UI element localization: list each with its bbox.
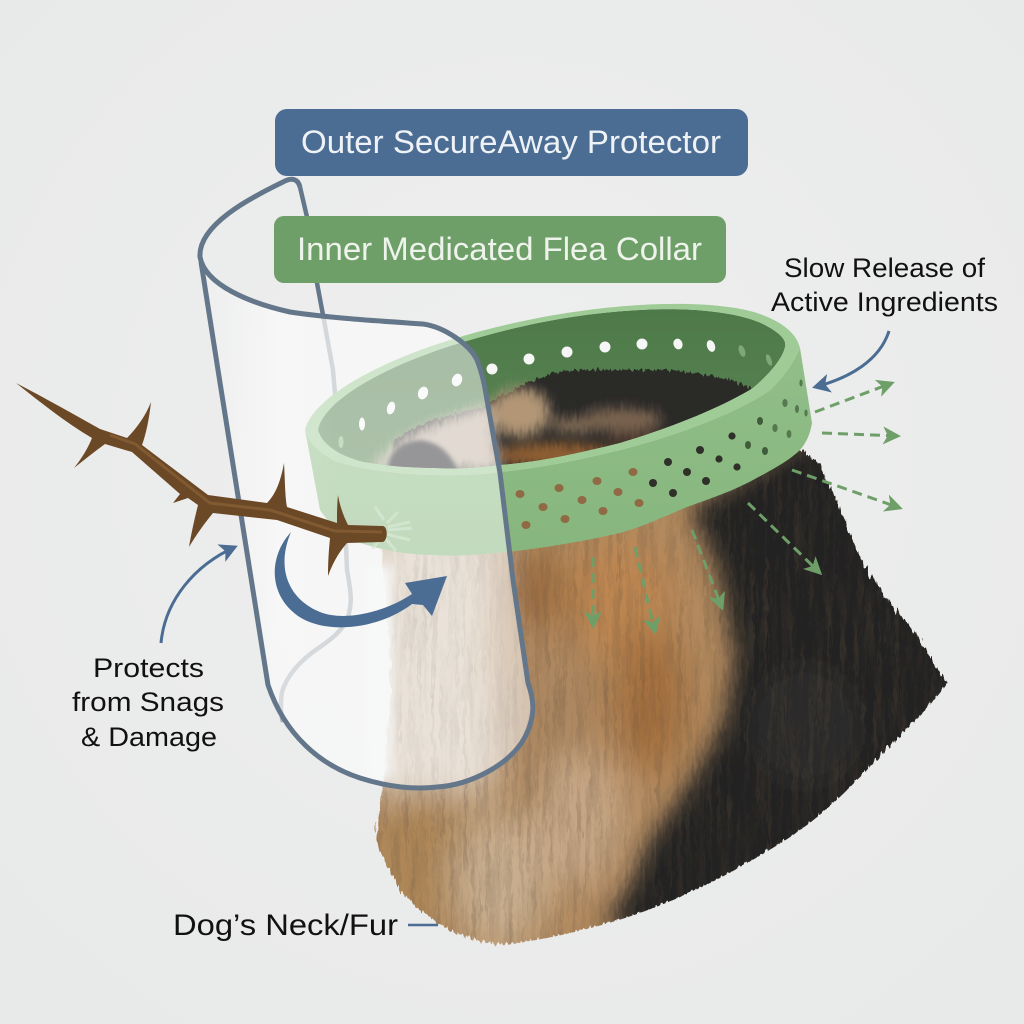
inner wall perforations	[338, 337, 773, 448]
pointer arrow: slow release	[815, 331, 889, 387]
release arrows	[593, 383, 900, 632]
pointer arrow: protects	[161, 547, 235, 643]
collar band and rim	[305, 304, 812, 556]
text: dog's neck: Dog’s Neck/Fur	[173, 909, 398, 942]
front perforations over tan fur	[516, 468, 644, 529]
outer protector shield	[200, 179, 533, 788]
thorn highlight	[110, 435, 382, 532]
dog's head inside the collar	[370, 367, 752, 468]
label pill: inner collar: Inner Medicated Flea Collar	[297, 231, 702, 267]
text: slow release: Active Ingredients	[771, 287, 998, 317]
collar inner wall	[318, 309, 785, 469]
infographic: collar protector diagram	[16, 109, 997, 946]
shield clear body	[200, 257, 533, 788]
text: protects	[72, 653, 224, 752]
deflection swoosh arrow	[275, 532, 447, 627]
text: protects: from Snags	[72, 687, 224, 717]
label pill: outer protector: Outer SecureAway Protector	[301, 124, 721, 160]
text: slow release: Slow Release of	[784, 253, 986, 283]
front perforations over dark fur	[649, 380, 808, 497]
shield back panel edge	[281, 187, 351, 722]
text: protects: Protects	[93, 653, 204, 683]
impact burst on collar	[372, 507, 412, 551]
label pill: outer protector	[275, 109, 748, 176]
thorn branch	[16, 383, 387, 576]
text: protects: & Damage	[81, 722, 217, 752]
label pill: inner collar	[274, 216, 726, 283]
shield outline	[200, 179, 533, 788]
text: slow release	[771, 253, 998, 317]
dog's neck fur	[374, 449, 948, 946]
soft fur edge under shield	[366, 565, 392, 780]
nose	[387, 440, 458, 472]
